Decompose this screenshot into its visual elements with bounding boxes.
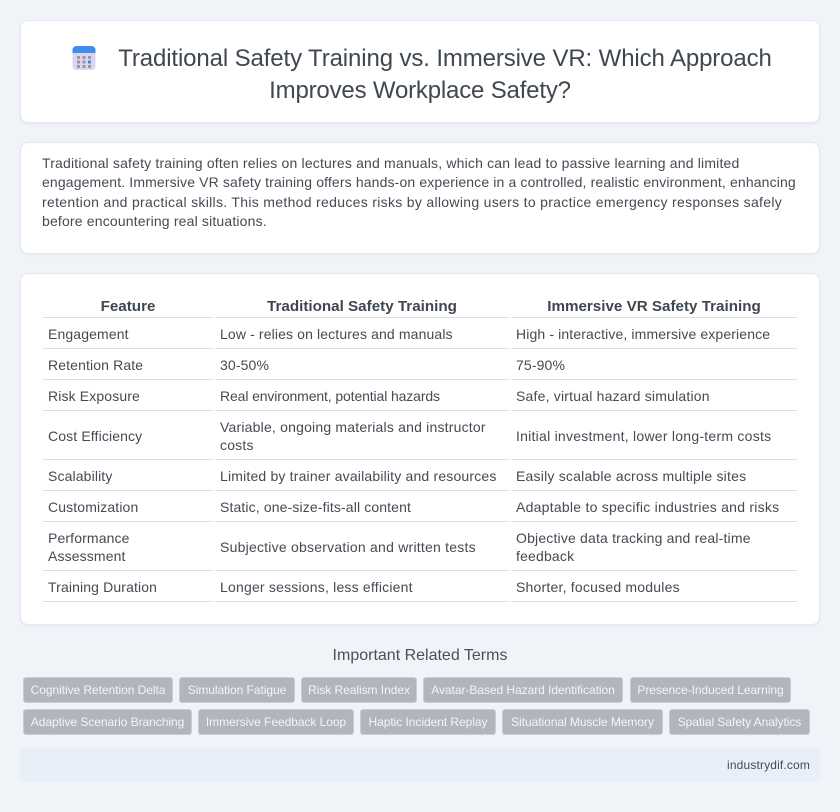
row: Scalability: Limited by trainer availability and resources xyxy=(220,468,497,484)
row: Performance Assessment: feedback xyxy=(516,548,574,564)
row: Customization xyxy=(48,499,779,515)
row: Engagement: Low - relies on lectures and manuals xyxy=(220,326,453,342)
row: Cost Efficiency: costs xyxy=(220,437,254,453)
row: Training Duration xyxy=(48,579,680,595)
row: Performance Assessment xyxy=(48,530,751,564)
comparison table xyxy=(43,298,797,602)
tag xyxy=(502,709,663,735)
row: Cost Efficiency: Variable, ongoing materials and instructor xyxy=(220,419,486,435)
row: Performance Assessment: Objective data tracking and real-time xyxy=(516,530,751,546)
footer bar xyxy=(20,748,820,782)
tag: Avatar-Based Hazard Identification xyxy=(431,683,615,697)
tag: Risk Realism Index xyxy=(308,683,410,697)
row: Retention Rate: Retention Rate xyxy=(48,357,143,373)
row: Scalability xyxy=(48,468,746,484)
row: Cost Efficiency: Cost Efficiency xyxy=(48,428,142,444)
row: Retention Rate xyxy=(48,357,565,373)
row: Risk Exposure xyxy=(48,388,710,404)
intro text: engagement. Immersive VR safety training offers hands-on experience in a controlled, realistic environment, enhancing xyxy=(42,174,796,190)
tag: Haptic Incident Replay xyxy=(369,715,487,729)
row: Scalability: Easily scalable across multiple sites xyxy=(516,468,746,484)
tag xyxy=(179,677,295,703)
row: Training Duration: Shorter, focused modules xyxy=(516,579,680,595)
row: Risk Exposure: Risk Exposure xyxy=(48,388,140,404)
row: Scalability: Scalability xyxy=(48,468,112,484)
tag: Simulation Fatigue xyxy=(188,683,286,697)
row: Training Duration: Longer sessions, less efficient xyxy=(220,579,413,595)
heading: related terms: Important Related Terms xyxy=(333,647,507,664)
intro text: Traditional safety training often relies on lectures and manuals, which can lead to passive learning and limited xyxy=(42,155,739,171)
row: Customization: Static, one-size-fits-all content xyxy=(220,499,411,515)
header: Immersive VR Safety Training: Immersive VR Safety Training xyxy=(547,298,761,315)
header: Traditional Safety Training: Traditional Safety Training xyxy=(267,298,457,315)
panel: header xyxy=(20,20,820,123)
row: Engagement: High - interactive, immersive experience xyxy=(516,326,770,342)
title: Improves Workplace Safety? xyxy=(269,77,571,104)
tag xyxy=(23,677,173,703)
tag xyxy=(301,677,417,703)
row: Performance Assessment: Performance xyxy=(48,530,130,546)
tag: Spatial Safety Analytics xyxy=(678,715,801,729)
tags: related terms xyxy=(23,677,810,735)
intro text: before encountering real situations. xyxy=(42,213,267,229)
row: Training Duration: Training Duration xyxy=(48,579,157,595)
tag: Situational Muscle Memory xyxy=(511,715,654,729)
tag: Adaptive Scenario Branching xyxy=(31,715,184,729)
row: Cost Efficiency: Initial investment, lower long-term costs xyxy=(516,428,771,444)
row: Customization: Adaptable to specific industries and risks xyxy=(516,499,779,515)
tag: Immersive Feedback Loop xyxy=(206,715,346,729)
row: Performance Assessment: Subjective observation and written tests xyxy=(220,539,476,555)
intro text: retention and practical skills. This method reduces risks by allowing users to practice emergency responses safely xyxy=(42,194,782,210)
tag xyxy=(630,677,791,703)
row: Risk Exposure: Real environment, potential hazards xyxy=(220,388,440,404)
panel: comparison table xyxy=(20,273,820,625)
footer: source: industrydif.com xyxy=(727,758,810,772)
row: Retention Rate: 75-90% xyxy=(516,357,565,373)
tag: Cognitive Retention Delta xyxy=(31,683,165,697)
tag xyxy=(423,677,623,703)
icon: calendar grid xyxy=(72,46,96,70)
row: Risk Exposure: Safe, virtual hazard simulation xyxy=(516,388,710,404)
row: Cost Efficiency xyxy=(48,419,771,453)
title: Traditional Safety Training vs. Immersive VR: Which Approach xyxy=(118,45,772,72)
title xyxy=(118,45,772,104)
tag xyxy=(360,709,496,735)
tag xyxy=(198,709,354,735)
row: Performance Assessment: Assessment xyxy=(48,548,126,564)
row: Customization: Customization xyxy=(48,499,138,515)
panel: introduction xyxy=(20,142,820,254)
row: Engagement: Engagement xyxy=(48,326,129,342)
tag xyxy=(669,709,810,735)
tag xyxy=(23,709,192,735)
tag: Presence-Induced Learning xyxy=(637,683,784,697)
header: Feature: Feature xyxy=(101,298,155,315)
row: Engagement xyxy=(48,326,770,342)
intro text xyxy=(42,155,796,229)
row: Retention Rate: 30-50% xyxy=(220,357,269,373)
